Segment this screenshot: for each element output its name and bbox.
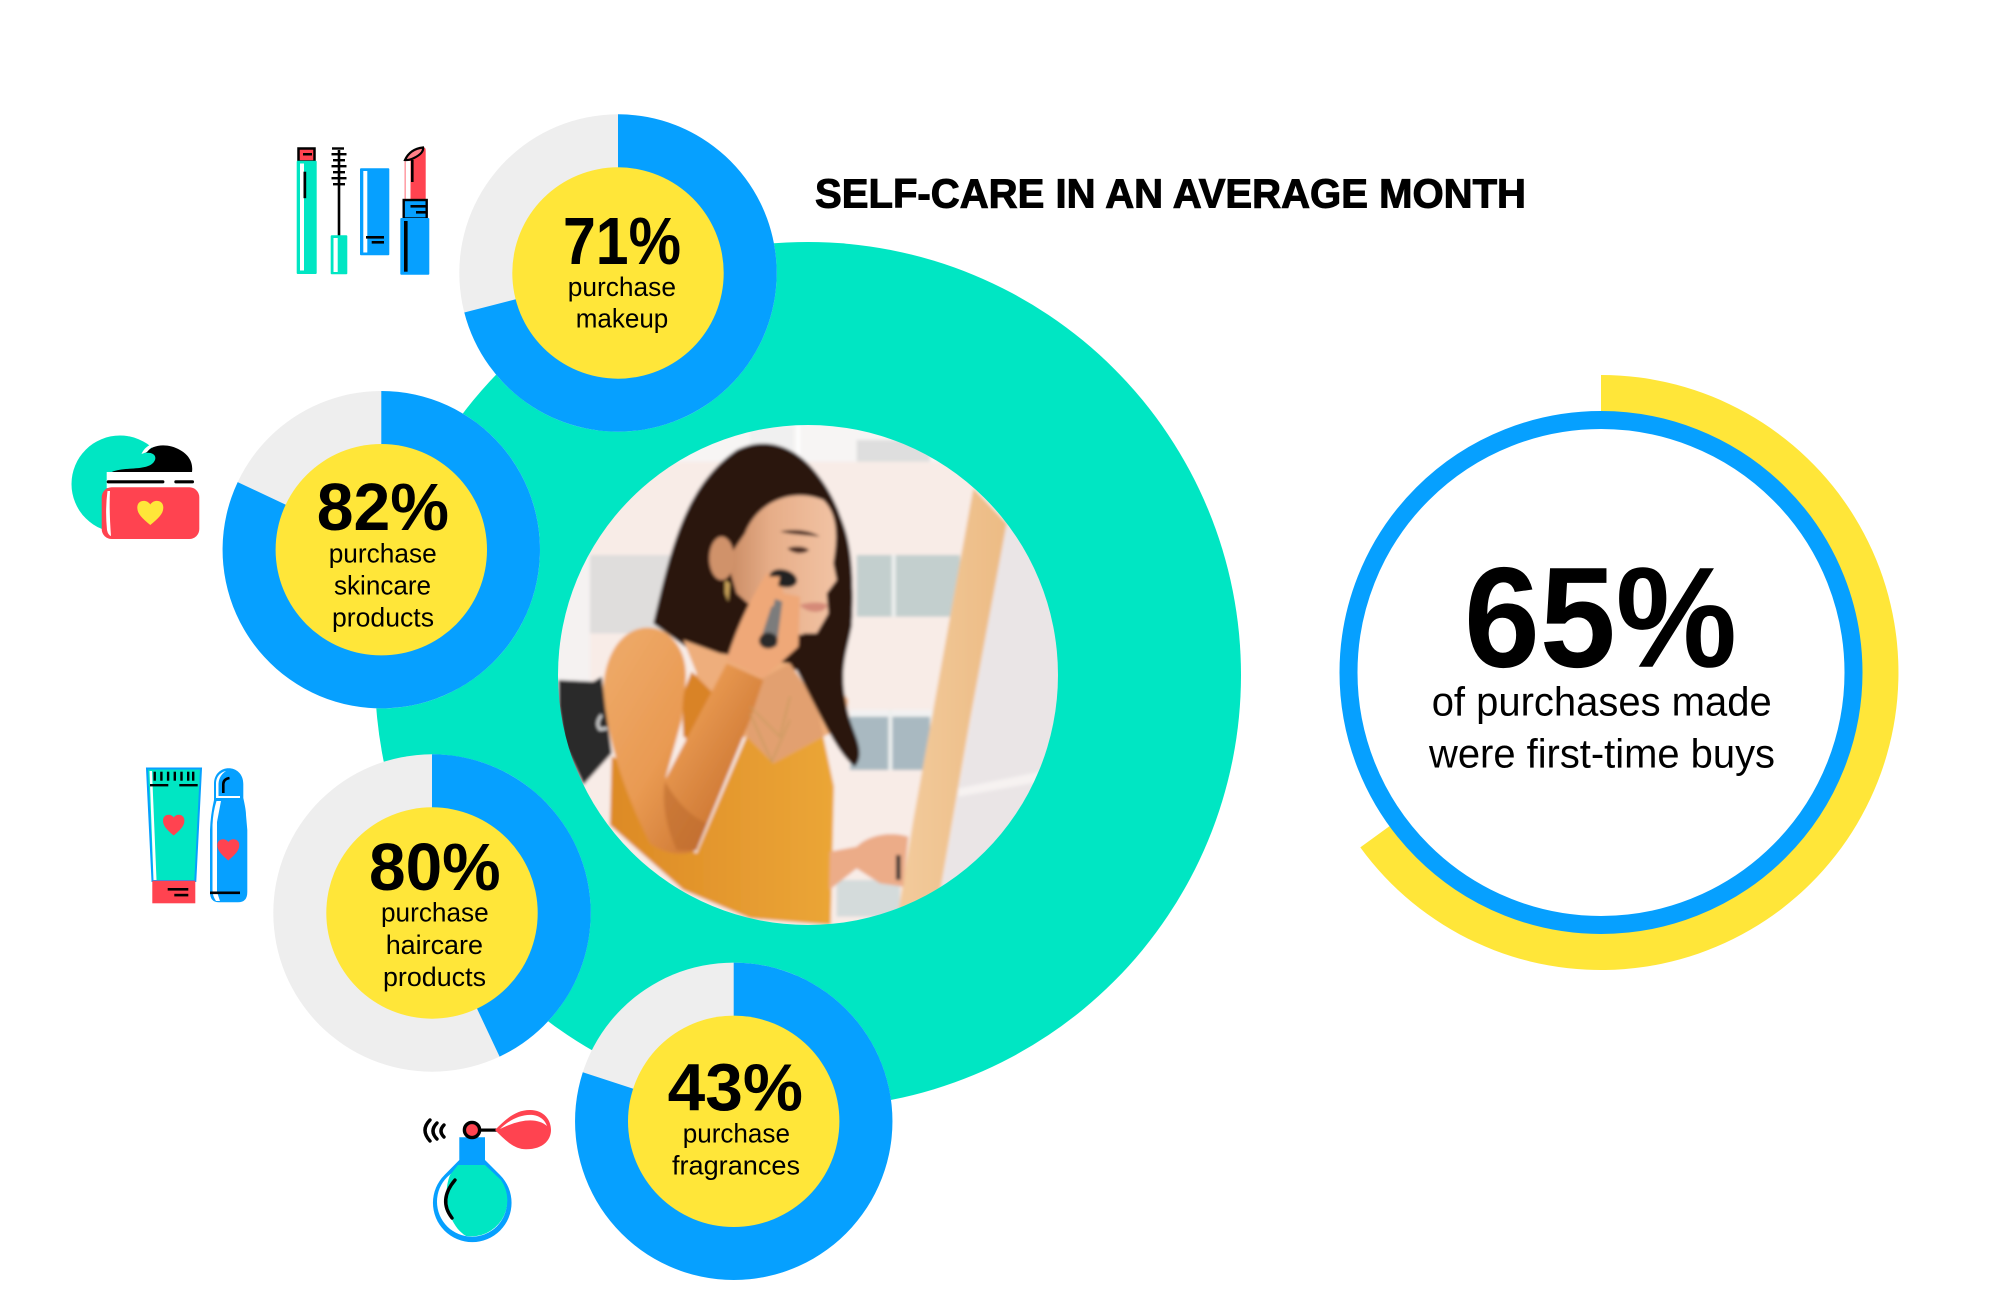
stat: 65% first-time buys [1348,375,1898,970]
label purchase fragrances: purchase [683,1119,790,1149]
value 71%: 71% [563,204,681,279]
atomizer [464,1122,500,1138]
donut: 82% purchase skincare products [223,391,540,708]
value 43%: 43% [668,1051,803,1126]
track and blue share of 43% donut [575,963,892,1280]
value 82%: 82% [317,470,449,545]
cream swirl [112,442,192,472]
donut: 71% purchase makeup [459,114,777,432]
caption: of purchases made [1432,679,1772,725]
mascara tube [297,148,317,274]
atomizer bulb [495,1110,551,1149]
label purchase haircare products: products [383,962,486,992]
photo: woman applying makeup at a mirror [550,420,1070,940]
lipstick [400,147,429,275]
mascara wand [331,147,347,274]
icon: haircare tube and spray bottle [147,768,247,903]
track and blue share of 82% donut [223,391,540,708]
spray bottle [210,768,247,902]
track and blue share of 80% donut [273,754,591,1072]
donut: 43% purchase fragrances [575,963,892,1280]
label purchase fragrances: fragrances [672,1150,800,1180]
label purchase skincare products: products [332,603,434,633]
blue ring [1348,420,1854,925]
icon: perfume bottle with atomizer [425,1110,551,1242]
compact [360,168,389,255]
label purchase haircare products [381,898,489,992]
green backdrop circle [375,242,1241,1108]
green circle behind jar [72,436,168,532]
track and blue share of 71% donut [459,114,777,432]
label purchase makeup: purchase [568,272,676,302]
label purchase skincare products [329,538,437,633]
jar body with heart [102,487,199,539]
value 80%: 80% [369,830,501,905]
label purchase skincare products: purchase [329,538,437,568]
scent waves [425,1120,444,1141]
caption [1428,679,1775,777]
caption: were first-time buys [1428,731,1775,777]
icon: makeup set (mascara, wand, compact, lipstick) [297,147,429,275]
label purchase haircare products: purchase [381,898,489,928]
label purchase makeup: makeup [576,304,668,334]
value 65%: 65% [1464,539,1737,698]
label purchase fragrances [672,1119,800,1180]
label purchase skincare products: skincare [334,570,431,600]
label purchase makeup [568,272,676,334]
tube [147,768,201,903]
icon: skincare cream jar [72,436,199,539]
jar lid [107,472,194,488]
label purchase haircare products: haircare [386,930,483,960]
bottle neck and body [433,1137,512,1242]
title: SELF-CARE IN AN AVERAGE MONTH [815,171,1526,217]
yellow 65% arc [1360,375,1898,970]
donut: 80% purchase haircare products [273,754,591,1072]
